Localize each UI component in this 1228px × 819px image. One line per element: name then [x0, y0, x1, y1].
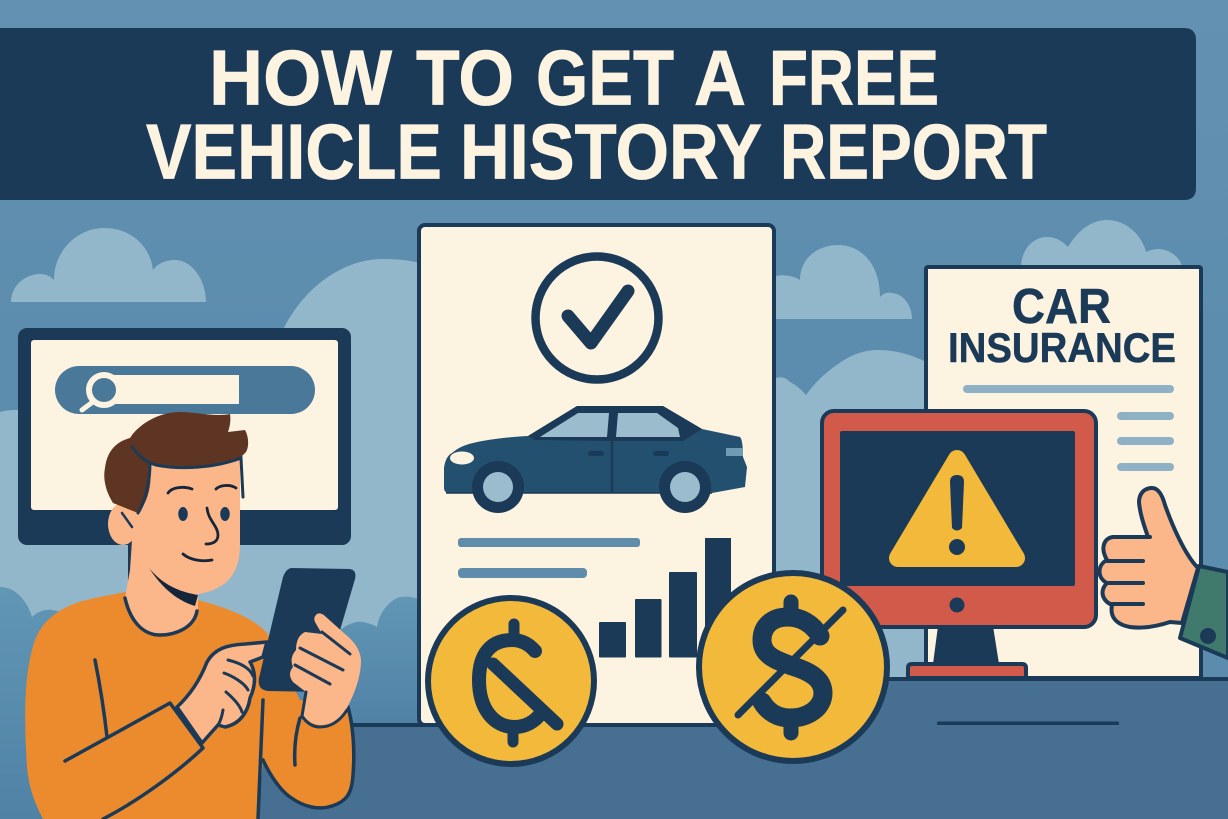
icon: car [444, 406, 747, 513]
bar chart [599, 538, 731, 658]
floor [255, 677, 1228, 819]
title line 2: REPORT [780, 108, 1047, 196]
neckline [125, 598, 197, 635]
phone [259, 568, 355, 692]
jaw shadow [149, 568, 198, 606]
clouds [0, 220, 1182, 819]
left hand [177, 642, 267, 743]
sweater outlines [65, 660, 354, 819]
icon: warning triangle [898, 459, 1016, 558]
report lines [458, 538, 640, 578]
title banner [0, 28, 1196, 200]
hair [104, 412, 248, 513]
insurance heading: CAR [1012, 280, 1111, 334]
right hand [290, 613, 361, 727]
panel: warning monitor [822, 411, 1096, 678]
icon: crossed dollar coin [699, 573, 887, 761]
title line 1: TO [416, 34, 514, 122]
title line 1 [209, 34, 939, 122]
monitor stand behind person [128, 540, 148, 595]
ear [108, 503, 138, 545]
panel: report document [419, 225, 774, 725]
title line 1: GET [536, 34, 674, 122]
insurance heading [948, 280, 1176, 371]
icon: thumbs up hand [1100, 488, 1228, 658]
document lines [963, 385, 1174, 471]
insurance heading: INSURANCE [948, 324, 1176, 371]
monitor stand [908, 626, 1026, 678]
title line 2 [146, 108, 1047, 196]
person [25, 412, 361, 819]
face details [168, 485, 236, 561]
icon: check circle [536, 256, 658, 380]
search bar [55, 366, 315, 414]
panel: insurance document [926, 267, 1201, 678]
title line 1: HOW [209, 34, 392, 122]
panel: search monitor [18, 328, 351, 545]
title line 2: HISTORY [460, 108, 762, 196]
title line 1: FREE [769, 34, 939, 122]
sweater [25, 592, 354, 819]
title line 1: A [694, 34, 746, 122]
icon: crossed cent coin [428, 598, 594, 764]
head and neck [120, 458, 240, 635]
icon: magnifier [82, 375, 119, 410]
title line 2: VEHICLE [146, 108, 442, 196]
